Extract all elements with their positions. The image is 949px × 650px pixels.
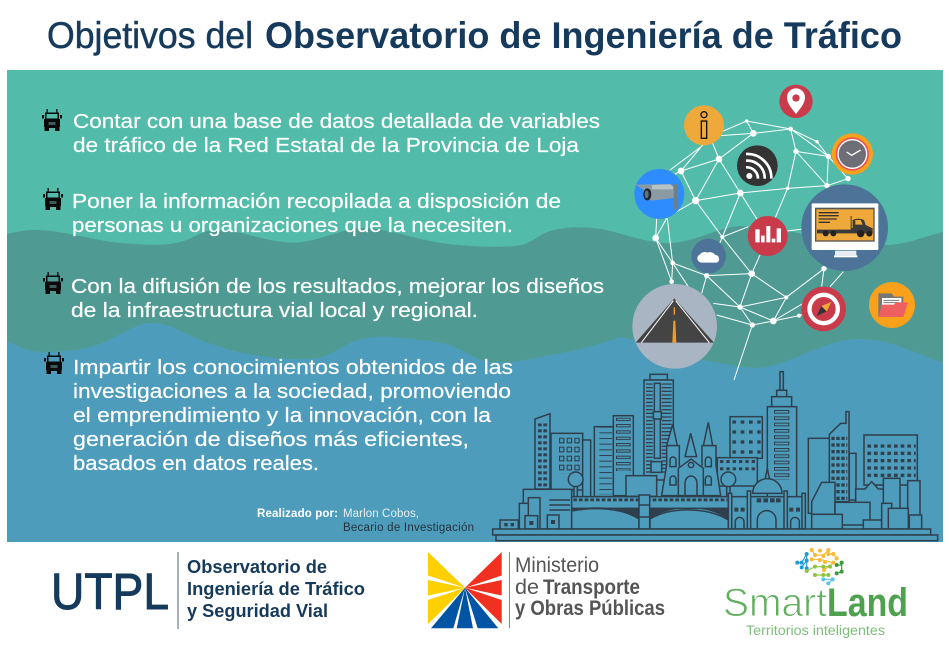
title: Objetivos del — [47, 15, 253, 56]
cathedral — [662, 422, 721, 496]
logo: Ministerio de Transporte y Obras Públicas — [428, 552, 665, 628]
network globe with icons — [632, 85, 915, 380]
buildings: left group — [535, 414, 657, 497]
logo: SmartLand: Smart — [723, 581, 827, 625]
lower left houses — [500, 498, 559, 530]
icon: clock — [832, 133, 873, 175]
logo: UTPL: Observatorio de — [187, 557, 327, 577]
icon: folder — [869, 282, 915, 328]
objective 4: Impartir los conocimientos obtenidos de las — [73, 357, 513, 379]
logo: Ministerio de Transporte y Obras Públicas: Ministerio — [515, 554, 599, 577]
objective 2: Poner la información recopilada a disposición de — [72, 191, 561, 213]
objective 1 — [42, 109, 600, 157]
credit: Marlon Cobos, — [343, 508, 419, 520]
title: Observatorio de Ingeniería de Tráfico — [265, 15, 902, 56]
icon: road — [632, 284, 717, 369]
objective 3: Con la difusión de los resultados, mejorar los diseños — [71, 276, 604, 298]
icon: brain of dots — [795, 548, 844, 585]
objective 3 — [43, 272, 604, 322]
objective 4: investigaciones a la sociedad, promoviendo — [73, 381, 511, 403]
credit: Becario de Investigación — [343, 522, 474, 534]
network lines — [656, 121, 848, 380]
logo: UTPL: Ingeniería de Tráfico — [187, 579, 365, 599]
credit: Realizado por: — [257, 508, 338, 520]
logo: UTPL: UTPL — [51, 563, 169, 620]
objective 1: Contar con una base de datos detallada de variables — [73, 111, 600, 133]
network nodes — [652, 119, 851, 328]
icon: bar chart — [748, 216, 788, 256]
buildings: right group — [808, 412, 922, 529]
logo: Ministerio de Transporte y Obras Públicas: de — [515, 576, 539, 599]
icon: wifi — [737, 145, 778, 186]
icon: camera — [634, 169, 684, 219]
building: tall tower — [644, 374, 673, 480]
icon: compass — [801, 287, 846, 331]
icon: truck — [43, 272, 63, 294]
domed station — [728, 468, 805, 529]
icon: info — [684, 105, 724, 145]
icon: truck — [43, 188, 63, 210]
city skyline — [493, 372, 938, 541]
objective 1: de tráfico de la Red Estatal de la Provincia de Loja — [73, 135, 580, 157]
trees — [568, 472, 736, 497]
logo: Ministerio de Transporte y Obras Públicas: Transporte — [543, 576, 640, 599]
icon: truck — [44, 352, 64, 374]
emblem — [428, 552, 502, 628]
icon: cloud — [691, 239, 726, 273]
objective 2 — [43, 188, 561, 237]
objective 4 — [44, 352, 513, 475]
icon: location pin — [779, 85, 813, 118]
logo: Ministerio de Transporte y Obras Públicas: y Obras Públicas — [515, 597, 665, 620]
objective 4: el emprendimiento y la innovación, con la — [73, 405, 492, 427]
bridge — [523, 489, 728, 529]
objective 2: personas u organizaciones que la necesiten. — [72, 215, 513, 237]
objective 4: generación de diseños más eficientes, — [73, 429, 469, 451]
city base — [493, 529, 938, 541]
panel: background with waves — [7, 70, 943, 542]
logo: SmartLand: Land — [827, 581, 908, 625]
credit — [257, 508, 474, 534]
building: skyscraper — [767, 372, 797, 500]
buildings: centre back — [717, 417, 762, 486]
objective 3: de la infraestructura vial local y regional. — [71, 300, 478, 322]
icon: truck — [42, 109, 62, 131]
objective 4: basados en datos reales. — [73, 453, 319, 475]
icon: monitor with truck — [801, 184, 888, 271]
logo: UTPL — [51, 552, 365, 629]
logo: UTPL: y Seguridad Vial — [187, 601, 328, 621]
logo: SmartLand — [723, 548, 908, 638]
logo: SmartLand: Territorios inteligentes — [746, 623, 885, 638]
